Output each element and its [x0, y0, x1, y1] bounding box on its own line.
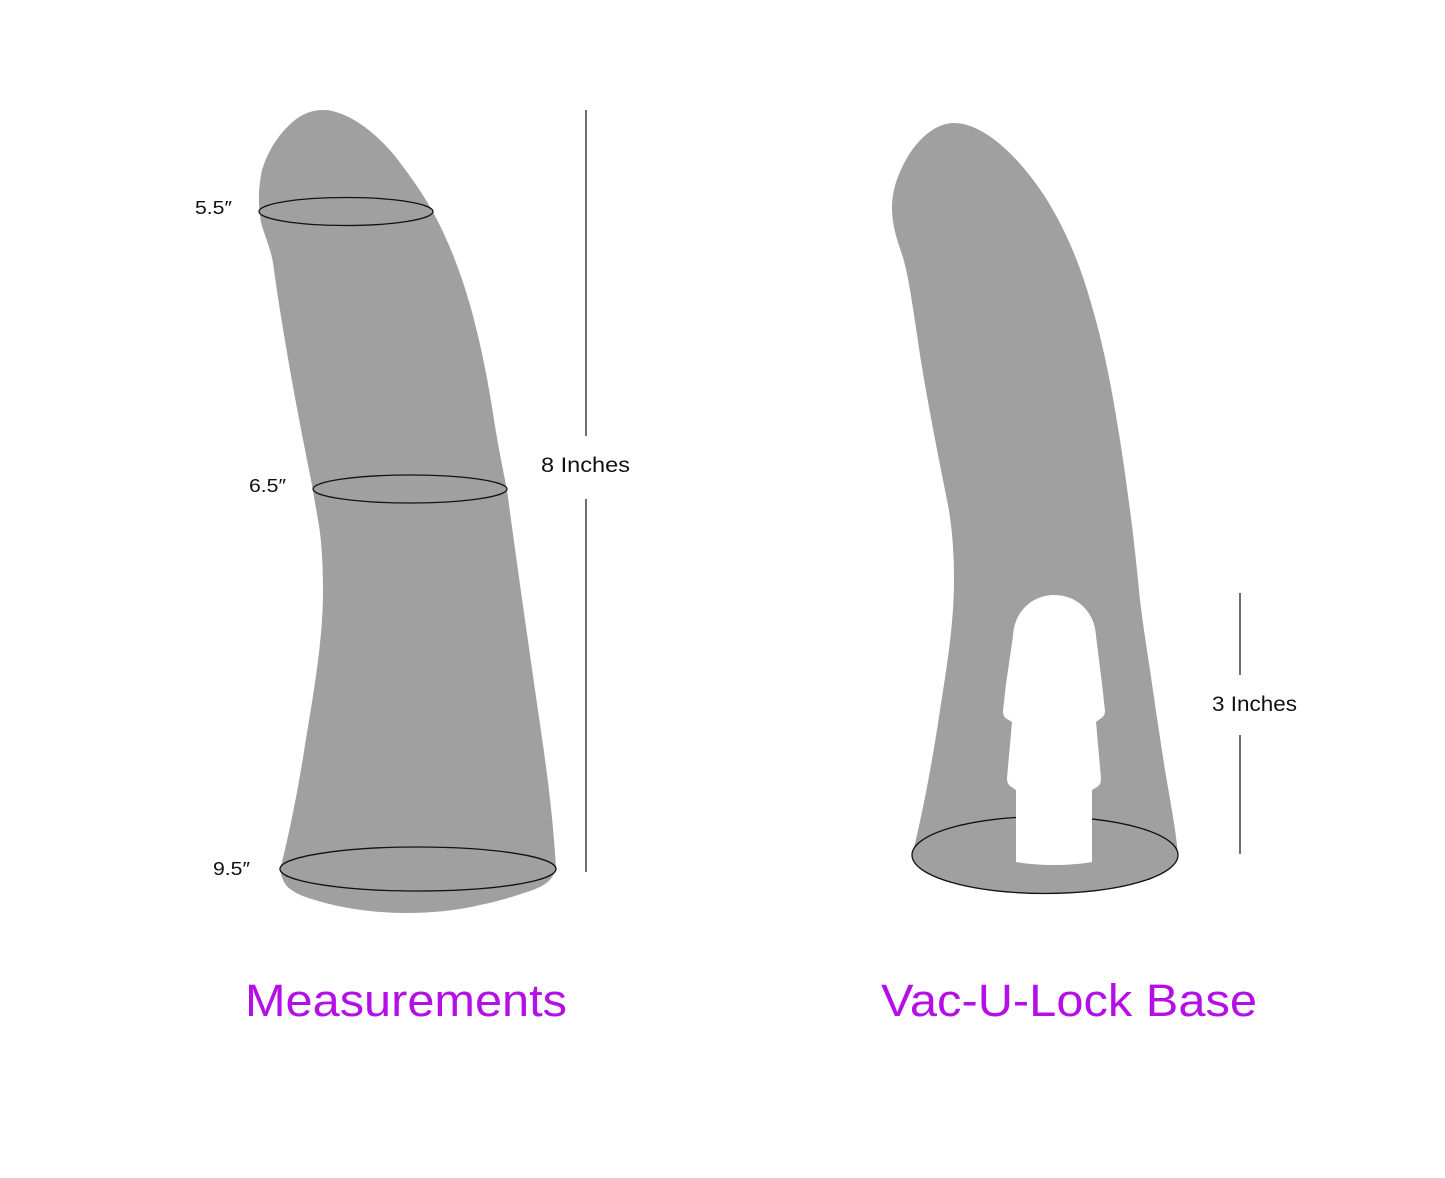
- label: 5.5 inches: 5.5″: [195, 198, 233, 218]
- ring: 6.5 inch circumference: [313, 475, 507, 503]
- heading: vac-u-lock base: Vac-U-Lock Base: [881, 975, 1257, 1026]
- ring: 5.5 inch circumference: [259, 198, 433, 226]
- label: 9.5 inches: 9.5″: [213, 859, 251, 879]
- ring: 9.5 inch circumference: [280, 847, 556, 891]
- dimension line: 3 inches: [1239, 593, 1241, 854]
- dimension line: 8 inches: [585, 110, 587, 872]
- silhouette: right product shape: [892, 123, 1178, 880]
- panel: measurements: [195, 110, 630, 1026]
- silhouette: left product shape: [259, 110, 556, 913]
- base ellipse: [912, 816, 1178, 894]
- heading: measurements: Measurements: [245, 975, 567, 1026]
- label: 3 inches: 3 Inches: [1212, 693, 1297, 716]
- label: 8 inches: 8 Inches: [541, 454, 630, 477]
- label: 6.5 inches: 6.5″: [249, 476, 287, 496]
- panel: vac-u-lock base: [881, 123, 1297, 1026]
- cut-out: vac-u-lock plug: [1003, 595, 1105, 865]
